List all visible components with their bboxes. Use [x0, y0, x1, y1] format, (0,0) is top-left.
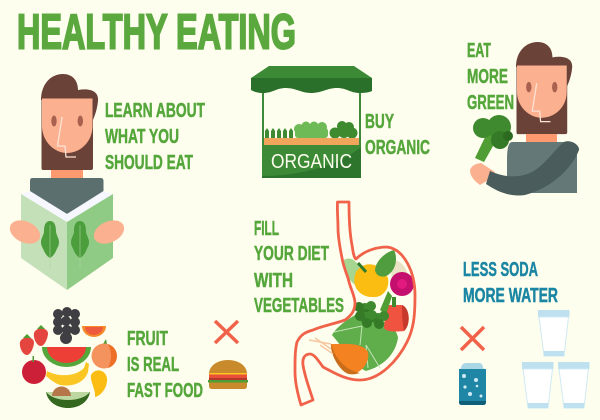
text: buy organic: ORGANIC [365, 136, 430, 159]
carrot [331, 344, 368, 374]
mango [91, 370, 107, 397]
panel: fruit is real fast food [20, 307, 248, 408]
blackberry [53, 307, 80, 344]
icon: organic market stall: ORGANIC [271, 150, 352, 173]
icon: organic market stall [251, 66, 372, 178]
orange slice [82, 326, 106, 337]
text: eat more green: EAT [467, 39, 491, 62]
watermelon [42, 347, 91, 367]
text: fill your diet [254, 217, 344, 317]
icon: fruit collection [20, 307, 117, 408]
peach [103, 339, 107, 344]
strawberries [20, 338, 34, 355]
text: fill your diet: FILL [254, 217, 279, 240]
text: eat more green: GREEN [467, 91, 514, 114]
green leaf [343, 259, 362, 288]
text: eat more green: MORE [467, 65, 508, 88]
icon: soda can [459, 363, 486, 405]
panel: eat more green [467, 39, 579, 195]
text: fruit is real fast food: FRUIT [127, 327, 168, 350]
panel: buy organic [251, 66, 430, 178]
yellow pepper [354, 264, 388, 297]
panel: less soda more water [459, 258, 590, 408]
text: learn about: WHAT YOU [105, 125, 179, 148]
lettuce [294, 122, 328, 138]
text: fill your diet: WITH [254, 269, 293, 292]
text: fruit is real fast food: FAST FOOD [127, 379, 203, 402]
text: fill your diet: YOUR DIET [254, 242, 329, 265]
broccoli [380, 291, 392, 315]
onion [390, 261, 408, 280]
panel: fill your diet with vegetables [254, 202, 415, 405]
text: less soda more water: LESS SODA [463, 258, 538, 281]
text: fill your diet: VEGETABLES [254, 294, 344, 317]
text: buy organic [365, 110, 430, 159]
text: learn about [105, 99, 205, 174]
text: buy organic: BUY [365, 110, 394, 133]
text: less soda more water: MORE WATER [463, 284, 558, 307]
text: fruit is real fast food [127, 327, 203, 402]
icon: water glass right [558, 362, 590, 408]
text: eat more green [467, 39, 514, 114]
lettuce [332, 312, 398, 371]
icon: man reading a book [6, 74, 128, 290]
beet [390, 272, 414, 296]
icon: water glass top [538, 310, 570, 356]
avocado [46, 392, 90, 408]
stomach outline [295, 202, 415, 405]
spinach leaf [375, 250, 396, 277]
banana [46, 362, 89, 386]
text: less soda more water [463, 258, 558, 307]
panel: learn about what you should eat [6, 74, 205, 290]
red pepper [384, 305, 409, 332]
icon: red cross [215, 321, 238, 343]
icon: water glass left [522, 362, 554, 408]
apple [22, 360, 46, 384]
icon: stomach filled with vegetables [295, 202, 415, 405]
broccoli [473, 115, 513, 162]
cucumbers [265, 128, 293, 138]
icon: burger [208, 360, 248, 389]
title: HEALTHY EATING [17, 6, 296, 60]
icon: red cross [461, 327, 484, 350]
broccoli [330, 121, 358, 138]
text: learn about: SHOULD EAT [105, 151, 193, 174]
text: learn about: LEARN ABOUT [105, 99, 205, 122]
text: fruit is real fast food: IS REAL [127, 353, 179, 376]
icon: man holding broccoli [470, 42, 579, 195]
